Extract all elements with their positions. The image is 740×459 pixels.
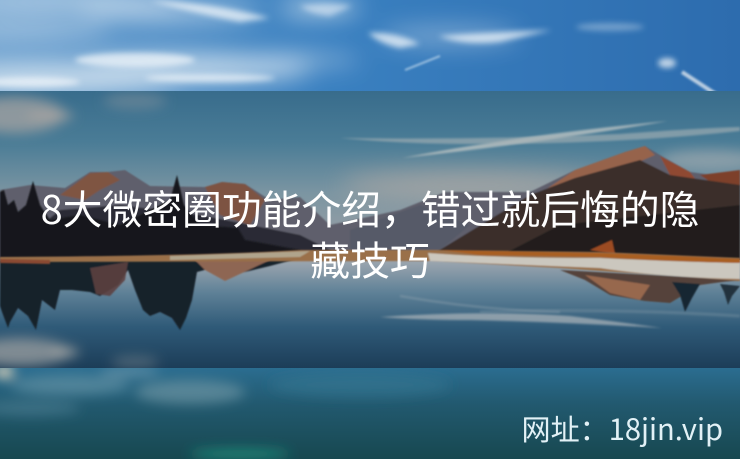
title [41,179,699,287]
mountains [0,146,740,262]
website address: 网址：18jin.vip [521,407,723,449]
title: 8大微密圈功能介绍，错过就后悔的隐 [41,179,699,236]
lower water band [0,366,740,459]
reflection of trees and mountains [0,258,740,330]
left tree line [0,175,300,258]
title: 藏技巧 [310,230,430,287]
clouds in the darkened sky [0,93,740,199]
water [0,260,740,368]
darkened centre band: sky, mountains, shore and reflection [0,91,740,368]
top sky band with clouds [0,0,740,91]
reflected contrails [0,296,740,368]
shoreline [0,250,740,281]
